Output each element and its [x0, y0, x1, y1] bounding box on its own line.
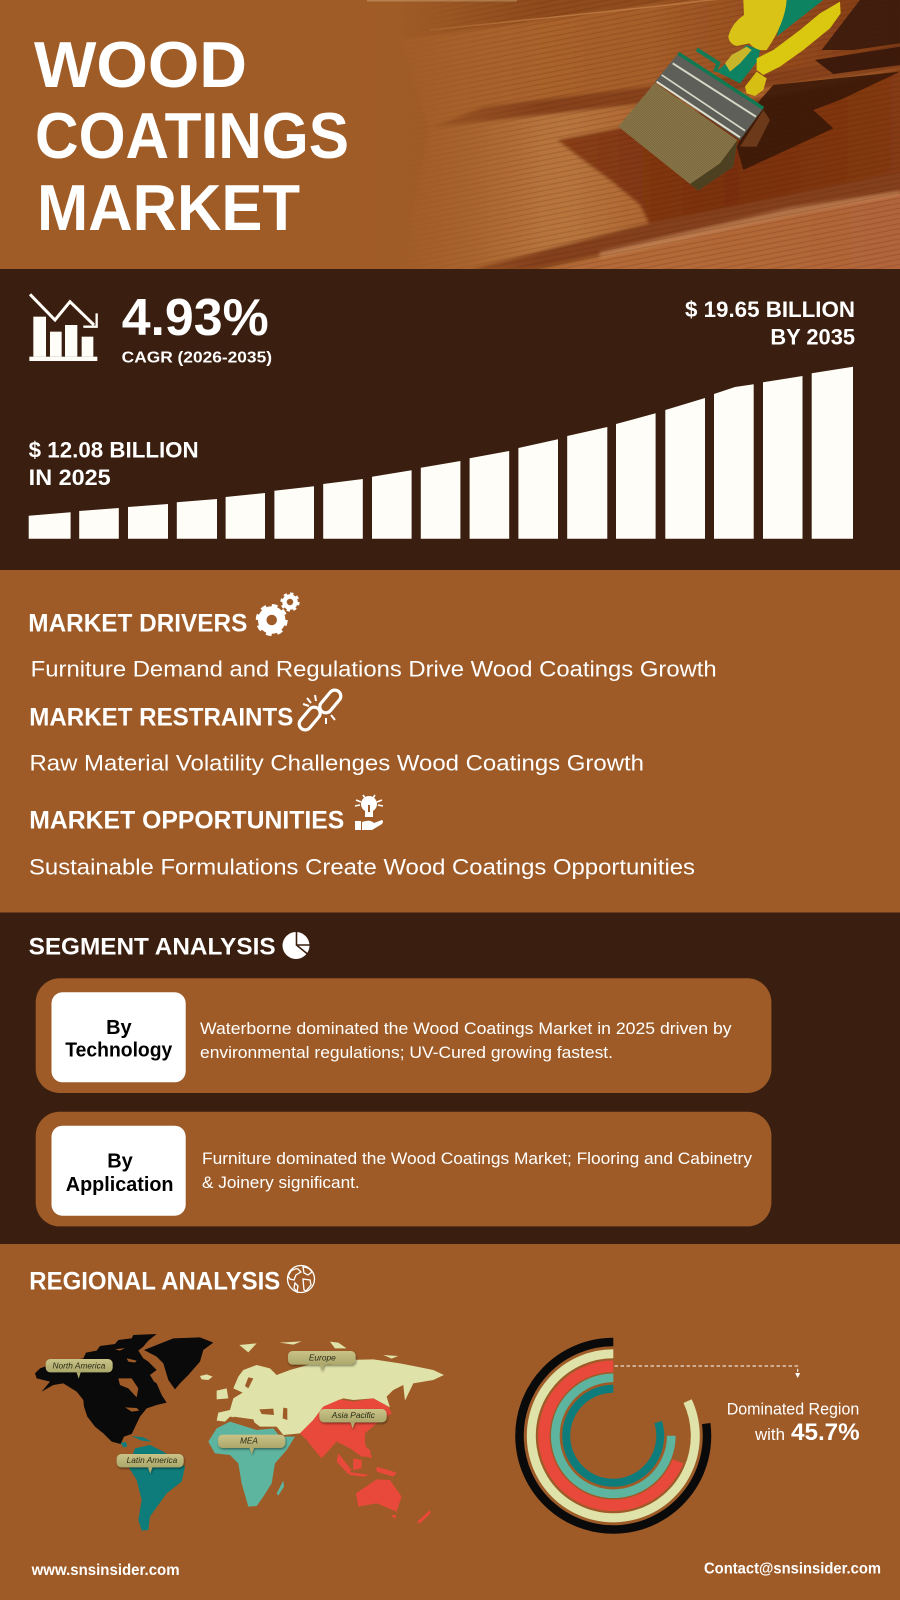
yellow glove: [728, 0, 787, 50]
CAGR value: 4.93%: [122, 289, 269, 347]
region: europe: [200, 1341, 444, 1435]
title: [34, 28, 349, 244]
header background: [0, 0, 900, 269]
icon: broken chain link: [297, 688, 343, 732]
radial bar chart: [519, 1342, 707, 1530]
tag: north america: [46, 1359, 113, 1379]
panel: segment analysis: [0, 912, 900, 1244]
heading: market opportunities: MARKET OPPORTUNITIES: [29, 807, 344, 835]
bar chart: [29, 367, 853, 539]
panel: market drivers, restraints, opportunities: [28, 594, 717, 879]
label box: [52, 1126, 186, 1216]
panel: regional analysis: [29, 1266, 860, 1531]
label box: Technology: [65, 1040, 173, 1062]
2025 value: [29, 437, 199, 490]
opportunity text: Sustainable Formulations Create Wood Coatings Opportunities: [29, 854, 695, 879]
label box: [52, 992, 186, 1082]
tag: north america: North America: [53, 1360, 106, 1370]
tag: asia pacific: Asia Pacific: [331, 1410, 376, 1420]
2025 value: $ 12.08 BILLION: [29, 437, 199, 462]
paintbrush and gloved hand: [618, 0, 900, 191]
region: north america: [35, 1334, 213, 1444]
cream fragment at top edge: [367, 0, 517, 2]
tag: MEA: [218, 1435, 285, 1454]
tag: latin america: [117, 1454, 184, 1474]
heading: market drivers: MARKET DRIVERS: [28, 610, 247, 638]
icon: pie chart: [282, 932, 310, 959]
tag: latin america: Latin America: [127, 1455, 178, 1465]
icon: gears: [258, 594, 298, 634]
callout: dominated region: 45.7%: [791, 1419, 860, 1446]
title: COATINGS: [35, 99, 349, 172]
card: by technology: [36, 978, 771, 1093]
driver text: Furniture Demand and Regulations Drive Wood Coatings Growth: [31, 657, 717, 682]
icon: growth chart: [29, 294, 97, 361]
heading: regional analysis: REGIONAL ANALYSIS: [29, 1267, 280, 1295]
region: asia pacific: [300, 1398, 431, 1524]
wood planks: [451, 0, 900, 269]
2035 value: $ 19.65 BILLION: [685, 297, 855, 322]
panel: market size: [0, 269, 900, 570]
callout: dominated region: [727, 1399, 860, 1446]
CAGR label: CAGR (2026-2035): [122, 350, 272, 366]
description: [202, 1149, 753, 1192]
fade to brown: [380, 0, 509, 269]
icon: globe: [288, 1266, 314, 1292]
icon: hand holding light bulb: [355, 795, 383, 830]
description: Furniture dominated the Wood Coatings Market; Flooring and Cabinetry: [202, 1149, 753, 1168]
region: latin america: [121, 1436, 185, 1531]
ferrule: [655, 53, 763, 140]
world map: [35, 1334, 444, 1531]
restraint text: Raw Material Volatility Challenges Wood Coatings Growth: [30, 751, 644, 776]
tag: MEA: MEA: [240, 1435, 258, 1445]
inland seas: [233, 1377, 287, 1424]
heading: market restraints: MARKET RESTRAINTS: [29, 703, 293, 731]
bristles: [618, 83, 737, 191]
2025 value: IN 2025: [29, 465, 111, 490]
cast shadows: [822, 0, 900, 50]
dashed callout arrow: [614, 1366, 800, 1378]
title: MARKET: [37, 171, 300, 244]
region: MEA: [208, 1422, 295, 1507]
description: & Joinery significant.: [202, 1173, 360, 1192]
footer contact: Contact@snsinsider.com: [704, 1560, 881, 1577]
hudson bay and great lakes: [115, 1348, 139, 1412]
tag: europe: [288, 1351, 356, 1371]
label box: Application: [66, 1174, 174, 1196]
tag: europe: Europe: [309, 1352, 336, 1362]
label box: By: [107, 1151, 134, 1173]
description: Waterborne dominated the Wood Coatings Market in 2025 driven by: [200, 1019, 732, 1038]
grain texture: [564, 0, 716, 527]
header photo: brush coating wood planks: [437, 0, 900, 269]
description: environmental regulations; UV-Cured growing fastest.: [200, 1043, 613, 1062]
2035 value: [685, 297, 855, 350]
plank highlight: [430, 0, 720, 30]
tag: asia pacific: [319, 1409, 387, 1429]
title: WOOD: [34, 28, 247, 101]
heading: segment analysis: SEGMENT ANALYSIS: [29, 933, 276, 960]
card: by application: [36, 1112, 771, 1226]
2035 value: BY 2035: [770, 325, 855, 350]
description: [200, 1019, 732, 1062]
footer website: www.snsinsider.com: [31, 1562, 180, 1579]
callout: dominated region: with: [754, 1425, 785, 1444]
brush handle: [717, 45, 760, 83]
callout: dominated region: Dominated Region: [727, 1399, 859, 1418]
label box: By: [106, 1017, 133, 1039]
